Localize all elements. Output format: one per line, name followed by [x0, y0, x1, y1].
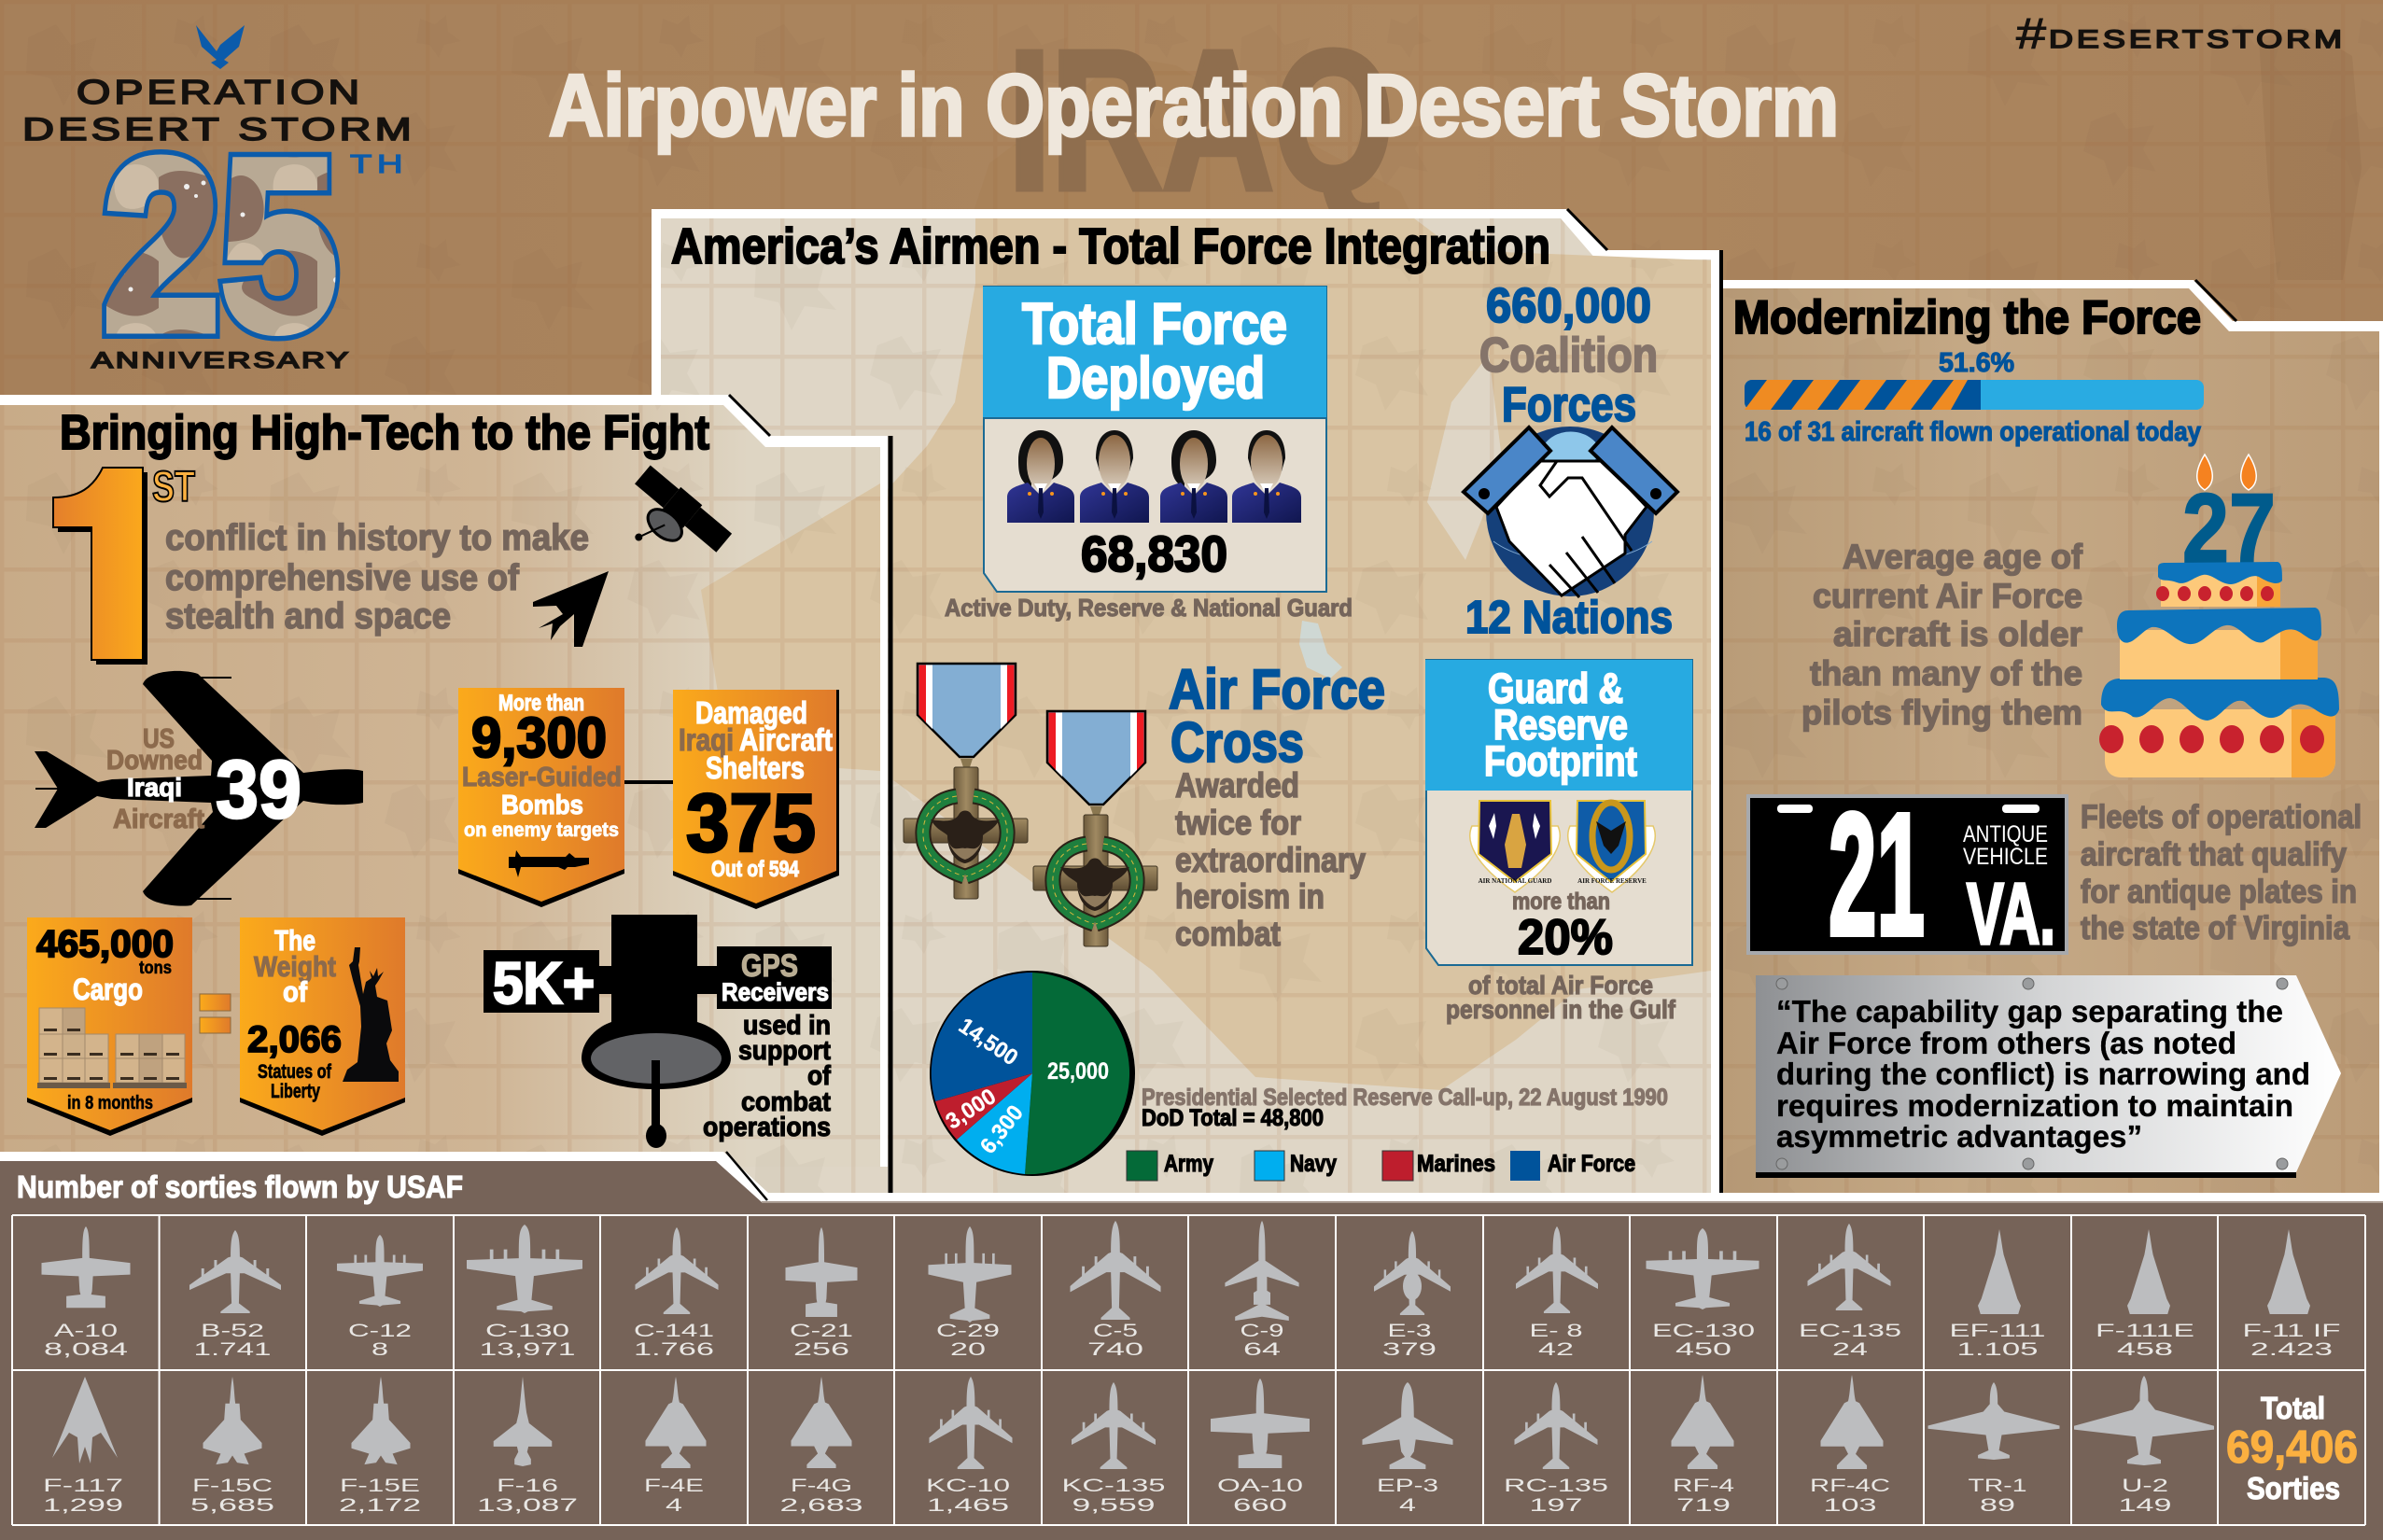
hashtag: DESERTSTORM [2049, 25, 2346, 53]
A-10 [41, 1226, 130, 1360]
card: guard and reserve footprint: more than [1512, 889, 1610, 915]
card: total force deployed: Total Force [1022, 292, 1287, 357]
callout: quote arrow [1756, 975, 2341, 1178]
chart caption: DoD Total = 48,800 [1142, 1105, 1324, 1131]
description: conflict in history to make [165, 518, 589, 558]
title: Airpower in Operation Desert Storm [549, 56, 1839, 154]
C-141 [634, 1227, 719, 1360]
card: guard and reserve footprint [1425, 660, 1692, 965]
license plate: VA. [1967, 865, 2055, 962]
gps receivers: support [738, 1036, 831, 1066]
C-141: C-141 [634, 1322, 714, 1341]
U-2: U-2 [2122, 1477, 2168, 1496]
EC-130 [1647, 1228, 1759, 1360]
legend: Air Force [1548, 1151, 1635, 1177]
TR-1: 89 [1980, 1496, 2015, 1516]
callout: quote arrow: Air Force from others (as noted [1776, 1026, 2236, 1060]
stat: coalition forces [1464, 279, 1677, 643]
F-111F [2242, 1229, 2341, 1360]
KC-135 [1062, 1382, 1165, 1516]
connector [624, 780, 673, 784]
C-5: C-5 [1093, 1322, 1138, 1341]
F-15C: F-15C [192, 1477, 273, 1496]
OA-10 [1211, 1379, 1310, 1516]
stat: coalition forces: Forces [1502, 378, 1636, 432]
callout: quote arrow: “The capability gap separating the [1776, 994, 2283, 1029]
candle number 27: 27 [2182, 474, 2276, 583]
banner: statues of liberty [240, 917, 405, 1136]
25 camouflage number: 25 [103, 108, 338, 382]
RF-4: 719 [1676, 1496, 1731, 1516]
card: guard and reserve footprint: Guard & [1488, 665, 1623, 712]
legend: Marines [1417, 1151, 1495, 1177]
C-21: 256 [793, 1340, 849, 1360]
operation text: OPERATION [77, 73, 363, 111]
chart caption [1142, 1085, 1668, 1131]
flames [2197, 455, 2256, 490]
label: us downed iraqi aircraft: US [143, 724, 175, 754]
stat: first conflict: stealth and space [165, 596, 451, 637]
banner: aircraft shelters: Damaged [695, 695, 807, 730]
stat: downed aircraft [35, 671, 363, 906]
text: air force cross: combat [1175, 915, 1281, 953]
banner: laser-guided bombs: on enemy targets [464, 819, 619, 841]
stat: first conflict: comprehensive use of [165, 558, 520, 598]
banner: laser-guided bombs: Bombs [501, 791, 583, 820]
EP-3: EP-3 [1377, 1477, 1438, 1496]
F-15E [339, 1377, 421, 1516]
card: total force deployed: Deployed [1046, 346, 1265, 411]
pie chart: reserve call-up: 3,000 [942, 1084, 1001, 1135]
EC-130: EC-130 [1652, 1322, 1755, 1341]
banner: statues of liberty: The [274, 924, 315, 957]
callout: quote arrow: during the conflict) is narrowing and [1776, 1057, 2310, 1091]
RC-135 [1504, 1382, 1608, 1516]
C-130: C-130 [485, 1322, 569, 1341]
pie chart: reserve call-up: 25,000 [1047, 1058, 1109, 1085]
progress bar [1745, 348, 2204, 447]
TR-1: TR-1 [1968, 1477, 2027, 1496]
callout: quote arrow: requires modernization to maintain [1776, 1088, 2293, 1123]
text: antique fleets: for antique plates in [2081, 874, 2357, 910]
chart caption: Presidential Selected Reserve Call-up, 22 August 1990 [1142, 1085, 1668, 1111]
license plate: VEHICLE [1963, 844, 2048, 870]
caption: active duty: Active Duty, Reserve & National Guard [945, 594, 1353, 622]
EF-111: 1.105 [1956, 1340, 2039, 1360]
EF-111 [1949, 1229, 2046, 1360]
RF-4C: RF-4C [1810, 1477, 1890, 1496]
F-4G: 2,683 [780, 1496, 862, 1516]
F-15E: F-15E [340, 1477, 420, 1496]
banner: statues of liberty: Weight [254, 950, 336, 983]
icon: air force cross medals [904, 664, 1157, 946]
C-29: 20 [950, 1340, 986, 1360]
st superscript: ST [152, 462, 195, 511]
gps receivers [484, 915, 832, 1148]
progress bar: 51.6% [1939, 348, 2014, 378]
F-117: 1,299 [43, 1496, 123, 1516]
icon: satellite [608, 463, 734, 584]
E-8: 42 [1538, 1340, 1574, 1360]
legend: Army [1164, 1151, 1213, 1177]
pie chart: reserve call-up: 14,500 [954, 1014, 1022, 1071]
RC-135: 197 [1529, 1496, 1583, 1516]
icon: birthday cake [2099, 455, 2339, 777]
A-10: A-10 [54, 1322, 118, 1341]
F-16: 13,087 [477, 1496, 578, 1516]
hashtag: # [2016, 9, 2047, 58]
F-15C: 5,685 [190, 1496, 274, 1516]
tier 1 [2161, 574, 2280, 607]
C-9 [1225, 1221, 1299, 1360]
heading: bringing high-tech: Bringing High-Tech to the Fight [60, 406, 709, 460]
panel: modernizing the force [1721, 250, 2383, 1202]
number one [58, 472, 147, 665]
card: guard and reserve footprint: Reserve [1493, 701, 1628, 749]
KC-10: KC-10 [926, 1477, 1010, 1496]
progress bar: 16 of 31 aircraft flown operational today [1745, 417, 2201, 447]
stat: coalition forces: 660,000 [1486, 279, 1651, 333]
icon: air force wings [196, 25, 245, 69]
F-111E [2096, 1229, 2194, 1360]
F-15C [190, 1377, 274, 1516]
total sorties [2226, 1391, 2358, 1505]
banner: statues of liberty: Liberty [271, 1081, 320, 1102]
banner: statues of liberty: 2,066 [247, 1019, 342, 1060]
RF-4C: 103 [1824, 1496, 1876, 1516]
banner: aircraft shelters: Out of 594 [711, 857, 800, 882]
anniversary logo [22, 25, 415, 382]
KC-135: 9,559 [1072, 1496, 1156, 1516]
C-12 [337, 1235, 423, 1360]
RF-4 [1671, 1375, 1735, 1516]
stat: coalition forces: Coalition [1479, 329, 1658, 383]
C-9: 64 [1243, 1340, 1282, 1360]
C-130 [467, 1225, 582, 1360]
EC-135 [1799, 1224, 1901, 1360]
icon: gps satellite dish [582, 915, 731, 1148]
banner: cargo [27, 917, 192, 1136]
banner: cargo: in 8 months [67, 1093, 153, 1113]
KC-10 [926, 1377, 1012, 1516]
license plate: 21 [1829, 778, 1925, 972]
equals sign [200, 994, 231, 1033]
desert storm text: DESERT STORM [22, 112, 415, 147]
stat: downed aircraft: Iraqi [127, 773, 182, 802]
gps usage text: used in [743, 1011, 831, 1041]
EC-135: EC-135 [1799, 1322, 1901, 1341]
table grid [12, 1215, 2365, 1525]
pie chart: reserve call-up: 6,300 [975, 1100, 1029, 1158]
C-12: 8 [371, 1340, 388, 1360]
TR-1 [1928, 1382, 2059, 1516]
icon: air force reserve badge [1568, 801, 1655, 892]
icon: air national guard badge [1470, 801, 1560, 892]
stat: coalition forces: 12 Nations [1465, 593, 1673, 643]
hashtag [2016, 9, 2346, 58]
stat: downed aircraft: Aircraft [113, 805, 204, 834]
EP-3: 4 [1399, 1496, 1417, 1516]
icon: handshake and globe [1464, 427, 1677, 597]
25 camouflage number: 25 [103, 108, 338, 382]
tier 3 [2105, 709, 2335, 777]
banner: cargo: tons [139, 959, 172, 978]
text: air force cross: twice for [1175, 804, 1301, 842]
C-29 [928, 1226, 1012, 1360]
tier 2 [2120, 630, 2318, 679]
gps label [717, 946, 832, 1009]
gps receivers: operations [703, 1113, 831, 1142]
F-117: F-117 [43, 1477, 123, 1496]
text: air force cross [1169, 658, 1385, 953]
text: average age: aircraft is older [1833, 615, 2082, 653]
gps receivers: combat [741, 1087, 831, 1117]
OA-10: 660 [1233, 1496, 1287, 1516]
B-52 [189, 1230, 281, 1360]
card: guard and reserve footprint: Footprint [1484, 737, 1637, 785]
F-4E [644, 1377, 706, 1516]
EC-135: 24 [1832, 1340, 1869, 1360]
KC-135: KC-135 [1062, 1477, 1165, 1496]
text: average age: pilots flying them [1801, 693, 2082, 732]
row: aircraft top [41, 1221, 2340, 1360]
F-16 [477, 1377, 578, 1516]
F-4E: 4 [666, 1496, 683, 1516]
number 39: 39 [216, 743, 301, 835]
license plate: ANTIQUE [1963, 821, 2048, 847]
anniversary text: ANNIVERSARY [91, 348, 351, 373]
text: antique fleets [2081, 799, 2362, 946]
banner: aircraft shelters [673, 690, 839, 909]
total sorties: 69,406 [2226, 1422, 2358, 1473]
C-5: 740 [1087, 1340, 1143, 1360]
panel: sorties [0, 1152, 2383, 1540]
F-111E: F-111E [2096, 1322, 2194, 1341]
EC-130: 450 [1675, 1340, 1731, 1360]
E-3: E-3 [1387, 1322, 1432, 1341]
E-8: E- 8 [1529, 1322, 1583, 1341]
text: average age: than many of the [1810, 654, 2082, 693]
heading: america's airmen: America’s Airmen - Total Force Integration [671, 218, 1550, 274]
EF-111: EF-111 [1949, 1322, 2046, 1341]
F-15E: 2,172 [339, 1496, 421, 1516]
banner: laser-guided bombs: Laser-Guided [462, 763, 622, 792]
card: total force deployed [983, 287, 1326, 592]
text: air force cross: Air Force [1169, 658, 1385, 721]
card: total force deployed: 68,830 [1081, 526, 1227, 582]
text: average age [1801, 538, 2083, 732]
icon: statue of liberty [343, 947, 399, 1082]
text: average age: current Air Force [1813, 577, 2082, 615]
text: antique fleets: aircraft that qualify [2081, 836, 2347, 873]
RF-4: RF-4 [1673, 1477, 1735, 1496]
icon: cargo boxes [37, 1008, 187, 1088]
gps receivers: Receivers [722, 978, 829, 1006]
legend: Navy [1290, 1151, 1337, 1177]
card: guard and reserve footprint: 20% [1518, 910, 1613, 965]
icon: bomb [509, 850, 589, 877]
banner: laser-guided bombs [458, 688, 624, 907]
B-52: B-52 [201, 1322, 264, 1341]
E-8 [1516, 1226, 1598, 1360]
stat: downed aircraft: Downed [106, 746, 203, 776]
text: average age: Average age of [1843, 538, 2083, 576]
icon: personnel [1007, 430, 1301, 523]
heading: modernizing the force: Modernizing the Force [1733, 291, 2201, 343]
stat: first conflict [53, 462, 589, 665]
U-2: 149 [2119, 1496, 2171, 1516]
F-16: F-16 [497, 1477, 558, 1496]
gps receivers: GPS [741, 948, 798, 984]
legend [1127, 1151, 1635, 1181]
C-29: C-29 [936, 1322, 1000, 1341]
RC-135: RC-135 [1504, 1477, 1608, 1496]
C-9: C-9 [1240, 1322, 1284, 1341]
F-4G [780, 1377, 862, 1516]
banner: laser-guided bombs: More than [498, 691, 584, 716]
th superscript: TH [350, 149, 408, 178]
C-12: C-12 [348, 1322, 412, 1341]
total sorties: Sorties [2247, 1471, 2340, 1505]
caption: personnel in the gulf: of total Air Force [1468, 971, 1653, 1000]
callout: quote arrow: asymmetric advantages” [1776, 1119, 2142, 1154]
RF-4C [1810, 1375, 1890, 1516]
caption: personnel in the gulf [1446, 971, 1676, 1024]
pie chart: reserve call-up [930, 971, 1135, 1176]
text: air force cross: Cross [1170, 711, 1304, 774]
icon: stealth aircraft [533, 571, 609, 647]
E-3: 379 [1382, 1340, 1437, 1360]
license plate [1748, 778, 2067, 972]
KC-10: 1,465 [927, 1496, 1009, 1516]
panel: total force integration [652, 209, 1719, 1202]
F-117 [43, 1377, 123, 1516]
icon: jet silhouette [35, 671, 363, 906]
F-111F: F-11 IF [2242, 1322, 2341, 1341]
icon: air national guard badge: AIR NATIONAL GUARD [1479, 877, 1551, 885]
caption: personnel in the gulf: personnel in the Gulf [1446, 995, 1676, 1024]
E-3 [1374, 1231, 1451, 1360]
text: air force cross: heroism in [1175, 877, 1325, 916]
row: aircraft bottom [43, 1375, 2358, 1516]
icon: air force reserve badge: AIR FORCE RESERVE [1577, 877, 1647, 885]
banner: aircraft shelters: Aircraft [739, 722, 833, 757]
banner: statues of liberty: of [283, 975, 308, 1008]
F-4G: F-4G [791, 1477, 852, 1496]
text: air force cross: Awarded [1175, 766, 1299, 805]
heading: sorties: Number of sorties flown by USAF [17, 1169, 463, 1204]
gps receivers: 5K+ [493, 951, 595, 1016]
C-130: 13,971 [480, 1340, 575, 1360]
banner: aircraft shelters: Shelters [706, 750, 805, 785]
banner: cargo: Cargo [73, 973, 143, 1006]
banner: statues of liberty: Statues of [258, 1061, 332, 1083]
OA-10: OA-10 [1217, 1477, 1303, 1496]
text: antique fleets: the state of Virginia [2081, 910, 2349, 946]
U-2 [2074, 1376, 2214, 1516]
banner: laser-guided bombs: 9,300 [471, 707, 607, 769]
EP-3 [1363, 1382, 1452, 1516]
F-111F: 2.423 [2250, 1340, 2333, 1360]
C-21 [786, 1227, 857, 1360]
banner: cargo: 465,000 [36, 922, 174, 965]
banner: aircraft shelters: 375 [686, 777, 816, 869]
5k+ label [484, 950, 599, 1013]
F-111E: 458 [2117, 1340, 2173, 1360]
F-4E: F-4E [644, 1477, 704, 1496]
A-10: 8,084 [44, 1340, 129, 1360]
banner: aircraft shelters: Iraqi [679, 722, 734, 757]
watermark: IRAQ: IRAQ [1008, 9, 1394, 231]
C-21: C-21 [790, 1322, 853, 1341]
total sorties: Total [2261, 1391, 2325, 1425]
C-5 [1070, 1221, 1161, 1360]
text: air force cross: extraordinary [1175, 841, 1366, 879]
panel: high tech [0, 395, 890, 1193]
gps receivers: of [807, 1061, 831, 1091]
B-52: 1.741 [194, 1340, 271, 1360]
C-141: 1.766 [634, 1340, 714, 1360]
